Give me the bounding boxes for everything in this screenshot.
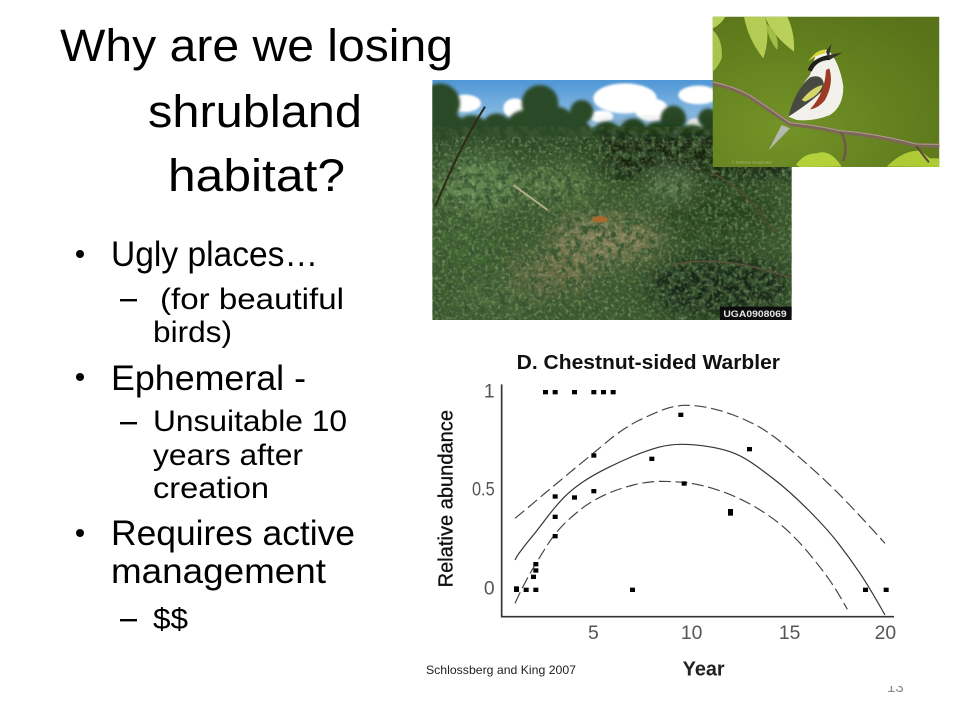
title bbox=[60, 20, 453, 201]
x axis labels: 15 bbox=[779, 623, 800, 644]
upper confidence limit bbox=[515, 405, 885, 543]
bullet: ephemeral: Ephemeral - bbox=[111, 359, 306, 398]
bullet: requires active management: management bbox=[111, 552, 326, 591]
x axis title: Year bbox=[683, 657, 725, 680]
y axis labels: 0 bbox=[484, 579, 495, 600]
branch bbox=[713, 82, 939, 162]
title: Why are we losing bbox=[60, 20, 453, 71]
x axis labels bbox=[588, 623, 896, 644]
bullet: requires active management bbox=[76, 514, 355, 636]
photo: shrubland clearing bbox=[420, 80, 792, 320]
bullet: requires active management: Requires active bbox=[111, 514, 355, 553]
chart title: D. Chestnut-sided Warbler bbox=[517, 351, 780, 374]
bullet: ugly places: birds) bbox=[153, 316, 232, 349]
bullet list bbox=[76, 235, 355, 636]
x axis labels: 20 bbox=[875, 623, 896, 644]
y axis labels: 1 bbox=[484, 381, 495, 402]
slide number: 13 bbox=[887, 679, 904, 696]
x axis labels: 10 bbox=[681, 623, 702, 644]
photo: shrubland clearing: UGA0908069 bbox=[723, 309, 787, 319]
y axis title: Relative abundance bbox=[436, 410, 458, 587]
data points bbox=[514, 390, 889, 592]
citation: Schlossberg and King 2007 bbox=[426, 663, 576, 677]
bullet: ephemeral: creation bbox=[153, 472, 269, 505]
bullet: ugly places bbox=[76, 235, 344, 349]
bullet: ephemeral bbox=[76, 359, 347, 505]
title: shrubland bbox=[148, 86, 362, 137]
y axis labels bbox=[472, 381, 495, 600]
photo: singing chestnut-sided warbler bbox=[713, 17, 939, 167]
lower confidence limit bbox=[515, 481, 847, 609]
x axis labels: 5 bbox=[588, 623, 599, 644]
bullet: ephemeral: years after bbox=[153, 439, 303, 472]
bullet: requires active management: $$ bbox=[153, 603, 188, 636]
axes bbox=[502, 384, 894, 617]
bullet: ephemeral: Unsuitable 10 bbox=[153, 405, 347, 438]
chart: chestnut-sided warbler relative abundance bbox=[436, 351, 896, 680]
title: habitat? bbox=[168, 150, 345, 201]
bird bbox=[768, 44, 843, 151]
watermark: © Matthew Studebaker bbox=[732, 159, 773, 164]
leaves bbox=[713, 17, 939, 167]
bullet: ugly places: (for beautiful bbox=[160, 283, 344, 316]
bullet: ugly places: Ugly places… bbox=[111, 235, 318, 274]
fitted curve bbox=[515, 444, 885, 615]
y axis labels: 0.5 bbox=[472, 479, 495, 500]
